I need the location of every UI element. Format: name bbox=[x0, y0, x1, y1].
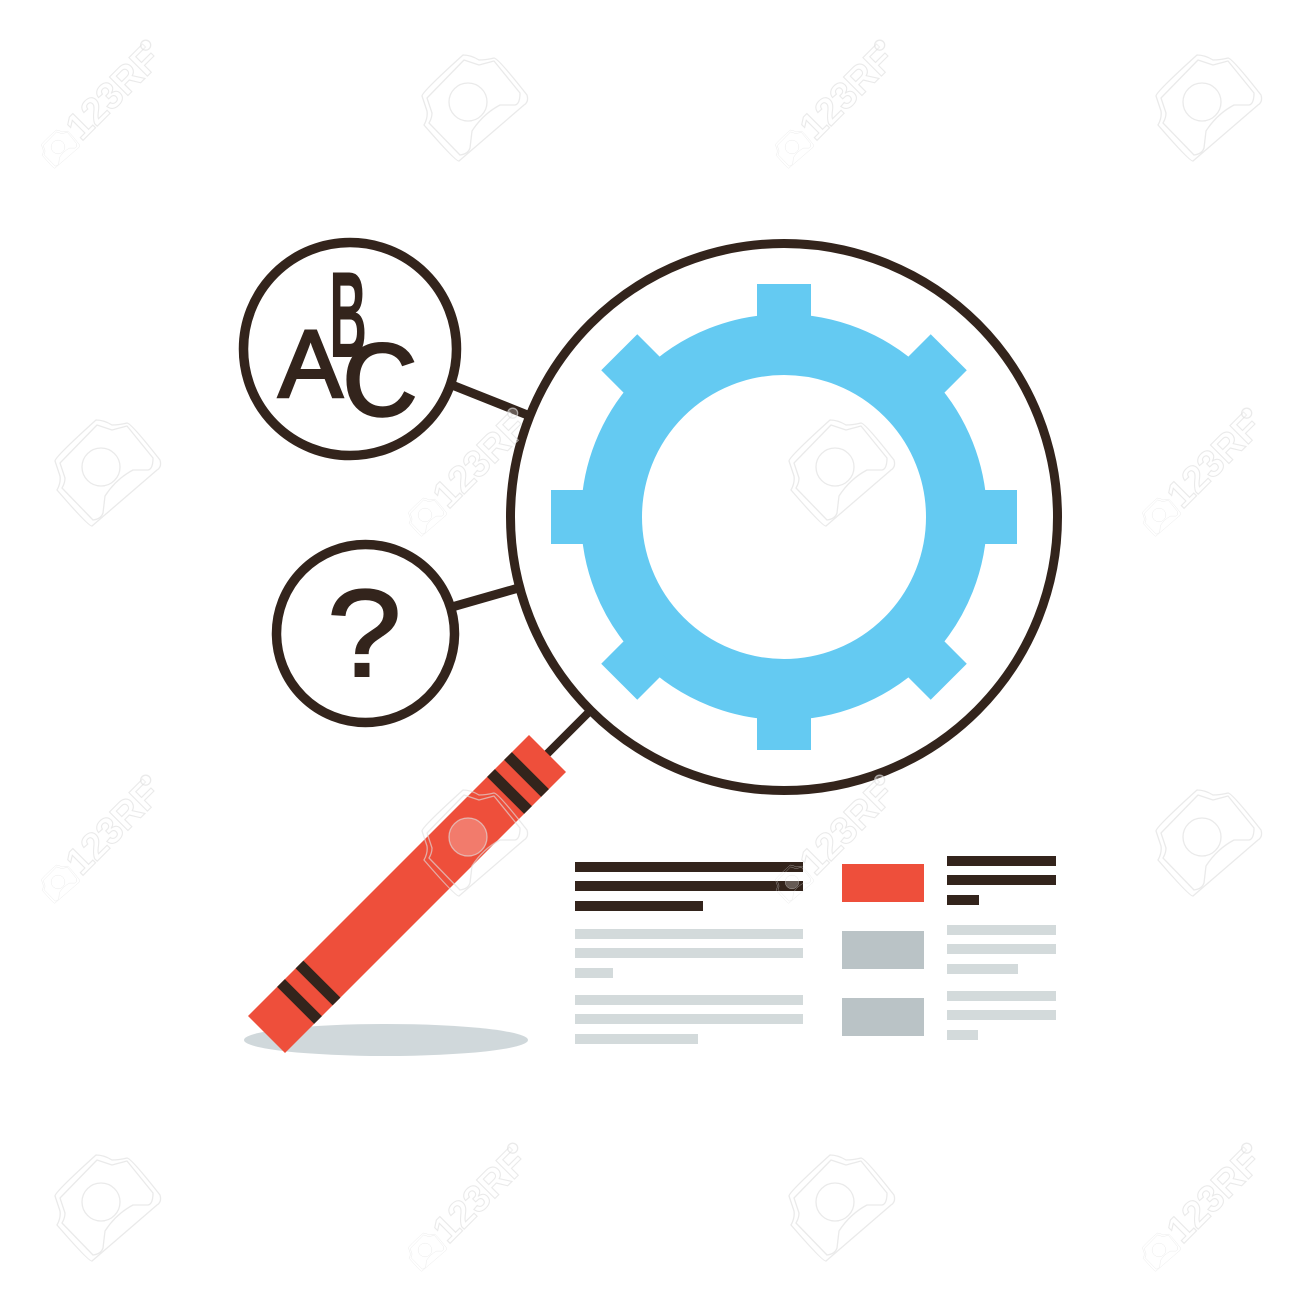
connector: question bubble to lens bbox=[452, 587, 522, 607]
watermark: stamps: 123RF bbox=[425, 406, 535, 516]
watermark: stamps: 123RF bbox=[1159, 406, 1269, 516]
bubble: question mark bbox=[276, 544, 454, 722]
text block: right column bbox=[947, 856, 1056, 1040]
icon: magnifying glass handle bbox=[248, 701, 600, 1053]
watermark: stamps: 123RF bbox=[792, 38, 902, 148]
letter A: A bbox=[278, 311, 343, 418]
watermark: stamps: 123RF bbox=[58, 38, 168, 148]
letter B: B bbox=[330, 246, 367, 383]
icon: blue gear bbox=[551, 284, 1017, 750]
bubble: ABC letters bbox=[244, 242, 456, 456]
ground shadow bbox=[244, 1024, 528, 1056]
text block: left column bbox=[575, 862, 803, 1044]
watermark: stamps: 123RF bbox=[425, 1141, 535, 1251]
letter C: C bbox=[343, 323, 417, 437]
watermark: stamps: 123RF bbox=[1159, 1141, 1269, 1251]
question mark glyph: ? bbox=[327, 565, 401, 703]
watermark: stamps: 123RF bbox=[58, 773, 168, 883]
connector: ABC bubble to lens bbox=[452, 385, 530, 416]
watermark: stamps: 123RF bbox=[792, 773, 902, 883]
lens: large circle bbox=[510, 244, 1058, 790]
panel: thumbnails bbox=[842, 864, 924, 1036]
